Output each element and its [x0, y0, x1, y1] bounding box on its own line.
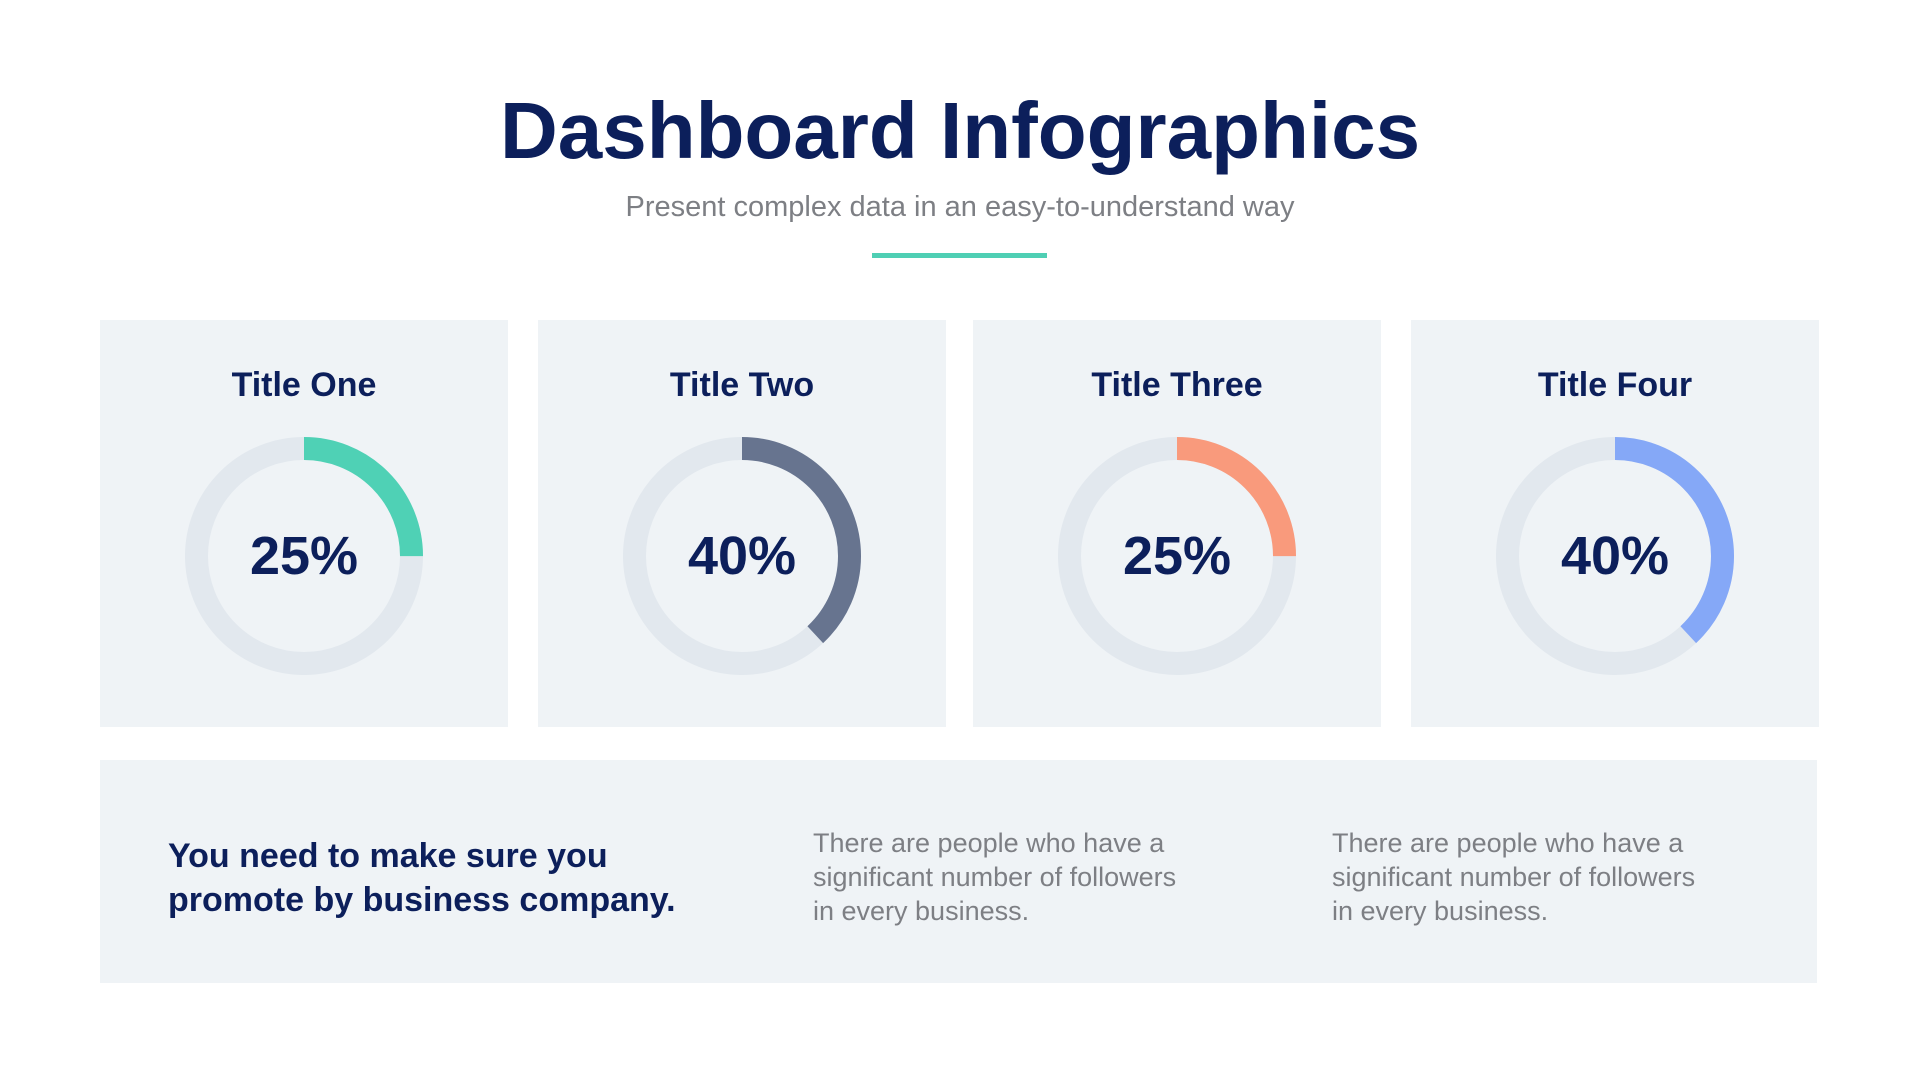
panel: title one [100, 320, 508, 727]
donut chart 40%: 40% [688, 526, 796, 586]
panel: bottom summary [100, 760, 1817, 983]
donut chart 40% [623, 437, 861, 675]
panel: title two [538, 320, 946, 727]
divider accent [872, 253, 1047, 258]
text block 2 [1332, 828, 1695, 926]
heading: Title One [232, 366, 376, 404]
text block 1 [813, 828, 1176, 926]
bold statement [168, 837, 676, 919]
text block 2: in every business. [1332, 896, 1548, 926]
donut chart 25% [1058, 437, 1296, 675]
text block 1: in every business. [813, 896, 1029, 926]
donut chart 40%: 40% [1561, 526, 1669, 586]
bold statement: You need to make sure you [168, 837, 608, 875]
panel: title three [973, 320, 1381, 727]
donut chart 25% [185, 437, 423, 675]
subtitle: Present complex data in an easy-to-understand way [626, 191, 1294, 223]
title: Dashboard Infographics [500, 86, 1420, 175]
donut chart 25%: 25% [1123, 526, 1231, 586]
donut chart 25%: 25% [250, 526, 358, 586]
text block 1: There are people who have a [813, 828, 1164, 858]
bold statement: promote by business company. [168, 881, 676, 919]
heading: Title Two [670, 366, 814, 404]
heading: Title Four [1538, 366, 1692, 404]
text block 2: There are people who have a [1332, 828, 1683, 858]
donut chart 40% [1496, 437, 1734, 675]
panel: title four [1411, 320, 1819, 727]
heading: Title Three [1091, 366, 1263, 404]
text block 2: significant number of followers [1332, 862, 1695, 892]
text block 1: significant number of followers [813, 862, 1176, 892]
